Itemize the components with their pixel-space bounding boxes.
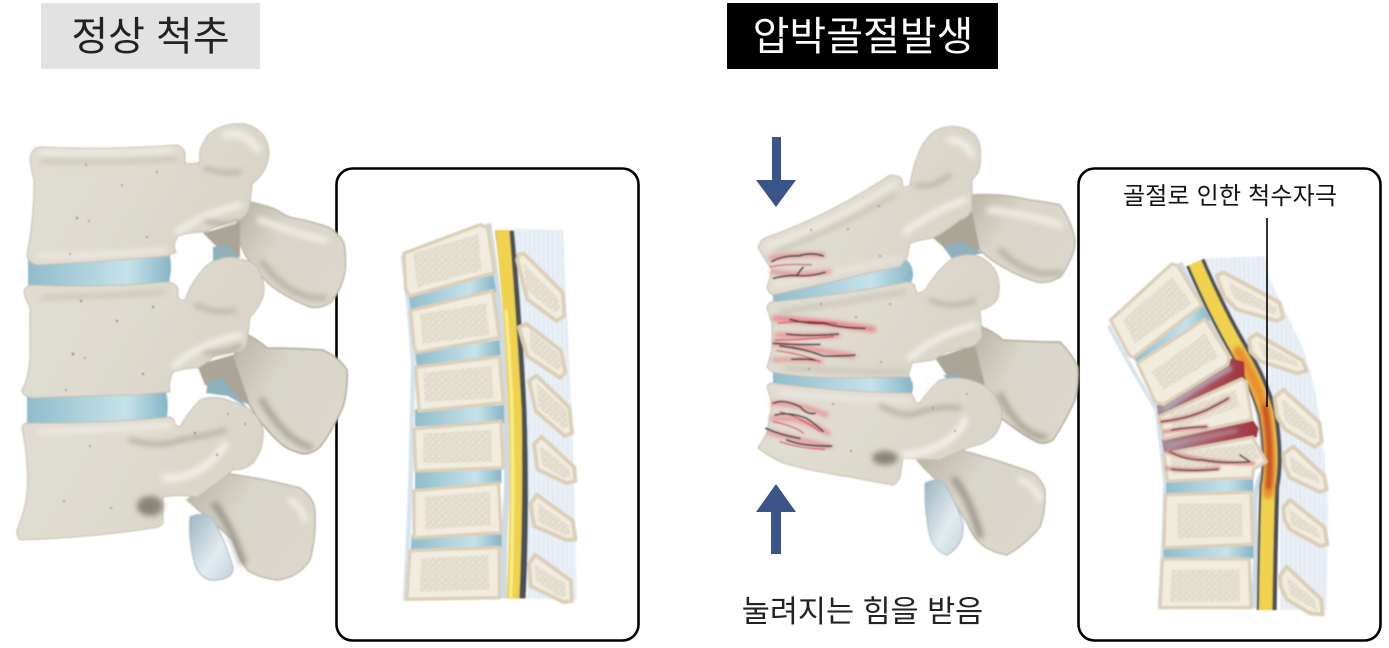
spinous process: upper <box>963 195 1075 282</box>
spinous sections <box>1217 272 1327 614</box>
inflamed disc highlight <box>1165 368 1237 446</box>
fractured vertebra 2 <box>767 255 999 378</box>
illustration: fractured vertebrae side view <box>758 126 1078 555</box>
fracture lines in section <box>1162 398 1253 470</box>
anterior ligament <box>403 255 413 601</box>
vertebra 1 <box>27 124 269 265</box>
caption: receiving compressive force: 눌려지는 힘을 받음 <box>742 595 983 629</box>
fracture cracks <box>766 254 873 449</box>
small blue ligament pieces <box>206 245 247 407</box>
disc: lower <box>773 370 913 397</box>
red crack lines <box>770 264 837 449</box>
blue oval facet <box>190 514 233 580</box>
fractured vertebra 3 <box>758 378 1002 485</box>
label: spinal cord irritation from fracture: 골절로 인한 척수자극 <box>1123 183 1337 210</box>
posterior ligament with stripes <box>1205 256 1328 610</box>
posterior ligament with stripes <box>513 228 577 600</box>
spinous sections <box>517 254 575 602</box>
cross section: fractured spinal column <box>1108 256 1328 614</box>
discs <box>408 275 504 552</box>
spinous process: lower <box>917 450 1045 555</box>
arch notch shadow <box>872 451 898 465</box>
bone pores <box>808 205 968 452</box>
inset panel: fractured spine cross section <box>1078 168 1380 640</box>
arrow: upward pressure <box>756 484 796 554</box>
bone shading <box>40 134 325 562</box>
blue oval facet <box>925 480 963 555</box>
spinous process: upper <box>236 202 346 308</box>
panel: compression fracture heading: 압박골절발생 <box>753 15 973 59</box>
upper discs <box>1132 305 1253 560</box>
spinous process: middle <box>969 327 1078 443</box>
cross section: normal spinal column <box>403 223 577 602</box>
disc: lower <box>27 388 168 425</box>
bone pores <box>63 164 246 509</box>
vertebra bone texture <box>413 234 493 592</box>
facet joint shadows <box>933 212 985 385</box>
red inflammation halo <box>768 255 873 447</box>
inset panel: normal spine cross section <box>336 168 638 640</box>
panel: normal spine heading: 정상 척추 <box>71 15 230 59</box>
posterior longitudinal ligament <box>1180 263 1265 608</box>
arrow: downward pressure <box>756 137 796 207</box>
leader line <box>1266 218 1268 407</box>
spinal cord <box>495 230 522 598</box>
vertebra 2 <box>22 257 264 398</box>
anterior ligament <box>1108 325 1165 608</box>
spinous process: middle <box>232 335 347 454</box>
wedge disc: upper <box>773 258 913 308</box>
arch notch shadow <box>137 496 163 516</box>
disc: upper <box>28 250 171 288</box>
spinous process: lower <box>187 473 315 580</box>
inflamed discs <box>1157 358 1259 454</box>
dura <box>1195 263 1272 610</box>
vertebra bone texture <box>1123 277 1260 602</box>
spinous bone texture <box>523 263 571 597</box>
panel: compression fracture heading <box>727 3 998 69</box>
cord compression inflammation <box>1238 352 1270 493</box>
posterior longitudinal ligament <box>488 223 507 598</box>
facet joint shadows <box>197 223 250 405</box>
black crack lines <box>766 254 865 446</box>
spinous bone texture <box>1228 282 1320 610</box>
illustration: normal lumbar vertebrae side view <box>17 124 347 580</box>
bone shading <box>768 140 1060 535</box>
vertebrae <box>404 225 503 599</box>
vertebra 3 <box>17 397 263 540</box>
panel: normal spine heading <box>41 3 260 69</box>
vertebrae <box>1111 264 1266 608</box>
dura <box>495 231 528 598</box>
fractured vertebra 1 <box>758 126 981 295</box>
small blue ligament pieces <box>943 242 983 382</box>
spinal cord <box>1195 263 1271 610</box>
